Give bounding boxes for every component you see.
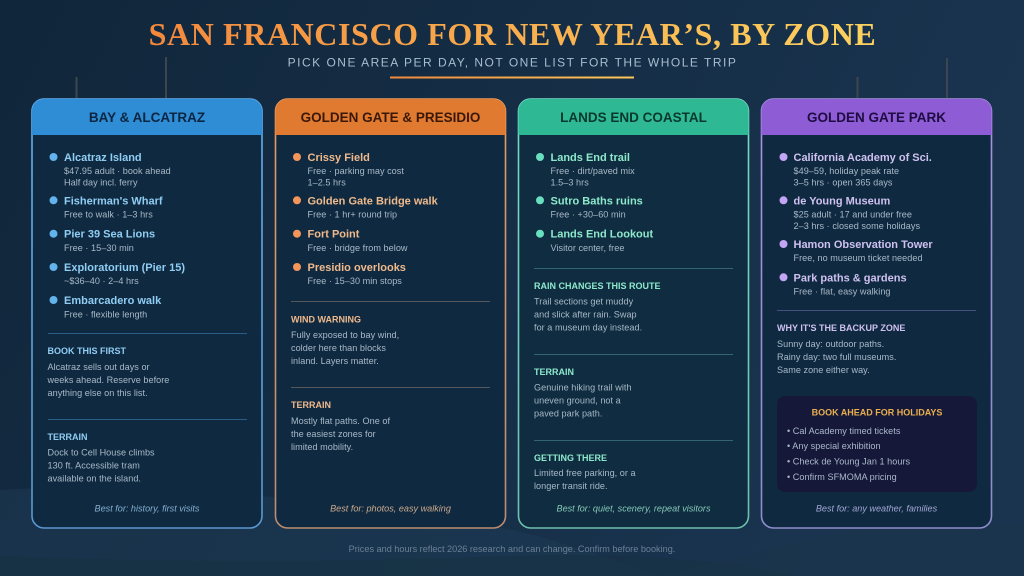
attractions list: Free · flexible length bbox=[64, 310, 147, 320]
panel: Golden Gate Park bbox=[762, 99, 992, 528]
section: terrain bbox=[291, 400, 390, 452]
best for: Best for: photos, easy walking bbox=[330, 504, 451, 514]
section: why it's the backup zone: WHY IT'S THE BACKUP ZONE bbox=[777, 323, 905, 333]
callout: book ahead for holidays bbox=[777, 396, 977, 492]
section: terrain: paved park path. bbox=[534, 408, 602, 418]
attractions list: Free, no museum ticket needed bbox=[794, 253, 923, 263]
attractions list bbox=[780, 152, 933, 296]
attractions list: 2–3 hrs · closed some holidays bbox=[794, 221, 920, 231]
best for: Best for: quiet, scenery, repeat visitors bbox=[556, 504, 711, 514]
section: book this first: anything else on this list. bbox=[48, 388, 148, 398]
section: why it's the backup zone: Rainy day: two full museums. bbox=[777, 352, 896, 362]
section: book this first: BOOK THIS FIRST bbox=[48, 346, 127, 356]
section: terrain: Mostly flat paths. One of bbox=[291, 416, 390, 426]
header: Golden Gate & Presidio bbox=[276, 99, 506, 135]
section: terrain: TERRAIN bbox=[48, 432, 88, 442]
attractions list: Free · +30–60 min bbox=[550, 210, 626, 220]
attractions list: Park paths & gardens bbox=[794, 272, 907, 284]
callout: book ahead for holidays: • Check de Young Jan 1 hours bbox=[787, 457, 911, 467]
attractions list: Free · dirt/paved mix bbox=[550, 166, 635, 176]
attractions list: Crissy Field bbox=[308, 152, 370, 164]
attractions list: $47.95 adult · book ahead bbox=[64, 166, 171, 176]
title: SAN FRANCISCO FOR NEW YEAR’S, BY ZONE bbox=[149, 16, 876, 52]
section: rain changes this route bbox=[534, 281, 661, 332]
section: wind warning: inland. Layers matter. bbox=[291, 356, 379, 366]
section: book this first bbox=[46, 346, 169, 398]
best for: Best for: history, first visits bbox=[95, 504, 200, 514]
attractions list: Hamon Observation Tower bbox=[794, 239, 933, 251]
callout: book ahead for holidays: • Any special exhibition bbox=[787, 441, 881, 451]
attractions list: ~$36–40 · 2–4 hrs bbox=[64, 276, 139, 286]
attractions list: Visitor center, free bbox=[550, 243, 624, 253]
panel: Golden Gate & Presidio bbox=[276, 99, 506, 528]
section: why it's the backup zone: Sunny day: outdoor paths. bbox=[777, 339, 884, 349]
section: getting there: longer transit ride. bbox=[534, 481, 608, 491]
section: why it's the backup zone: Same zone either way. bbox=[777, 365, 870, 375]
decorative posts above cards bbox=[76, 57, 947, 98]
attractions list: Lands End trail bbox=[550, 152, 630, 164]
attractions list: 3–5 hrs · open 365 days bbox=[794, 178, 893, 188]
attractions list: Fisherman's Wharf bbox=[64, 195, 163, 207]
section: wind warning bbox=[291, 314, 399, 366]
attractions list: $25 adult · 17 and under free bbox=[794, 210, 912, 220]
attractions list bbox=[50, 152, 185, 320]
section: rain changes this route: for a museum day instead. bbox=[534, 322, 642, 332]
panel: Lands End Coastal bbox=[518, 99, 748, 528]
callout: book ahead for holidays: BOOK AHEAD FOR HOLIDAYS bbox=[812, 408, 942, 418]
header: Lands End Coastal bbox=[518, 99, 748, 135]
section: terrain bbox=[534, 367, 632, 418]
best for: Best for: any weather, families bbox=[816, 504, 938, 514]
section: terrain: Dock to Cell House climbs bbox=[48, 448, 155, 458]
header: Golden Gate & Presidio: GOLDEN GATE & PRESIDIO bbox=[301, 110, 480, 125]
attractions list: Fort Point bbox=[308, 229, 360, 241]
subtitle: PICK ONE AREA PER DAY, NOT ONE LIST FOR THE WHOLE TRIP bbox=[288, 56, 737, 70]
attractions list: Golden Gate Bridge walk bbox=[308, 195, 439, 207]
section: terrain: the easiest zones for bbox=[291, 429, 376, 439]
section: terrain: available on the island. bbox=[48, 474, 141, 484]
section: getting there bbox=[534, 453, 637, 491]
attractions list: $49–59, holiday peak rate bbox=[794, 166, 899, 176]
section: rain changes this route: RAIN CHANGES THIS ROUTE bbox=[534, 281, 661, 291]
title underline bbox=[390, 76, 634, 78]
header: Lands End Coastal: LANDS END COASTAL bbox=[560, 110, 707, 125]
attractions list: Pier 39 Sea Lions bbox=[64, 229, 155, 241]
section: getting there: GETTING THERE bbox=[534, 453, 607, 463]
attractions list: Embarcadero walk bbox=[64, 295, 162, 307]
section: book this first: weeks ahead. Reserve before bbox=[46, 375, 169, 385]
attractions list: Free to walk · 1–3 hrs bbox=[64, 210, 153, 220]
attractions list: 1–2.5 hrs bbox=[308, 178, 346, 188]
section: rain changes this route: Trail sections get muddy bbox=[534, 296, 634, 306]
attractions list: Free · 15–30 min bbox=[64, 243, 134, 253]
attractions list: Free · 15–30 min stops bbox=[308, 276, 402, 286]
header: Golden Gate Park bbox=[762, 99, 992, 135]
section: wind warning: WIND WARNING bbox=[291, 314, 361, 324]
section: terrain: TERRAIN bbox=[291, 400, 331, 410]
attractions list bbox=[536, 152, 653, 253]
attractions list: de Young Museum bbox=[794, 195, 890, 207]
footer note: Prices and hours reflect 2026 research and can change. Confirm before booking. bbox=[349, 544, 675, 554]
attractions list: Half day incl. ferry bbox=[64, 178, 138, 188]
attractions list: Free · bridge from below bbox=[308, 243, 408, 253]
attractions list: Free · flat, easy walking bbox=[794, 286, 891, 296]
attractions list: Lands End Lookout bbox=[550, 229, 653, 241]
attractions list: Alcatraz Island bbox=[64, 152, 142, 164]
callout: book ahead for holidays: • Cal Academy timed tickets bbox=[787, 426, 901, 436]
attractions list: 1.5–3 hrs bbox=[550, 178, 589, 188]
section: rain changes this route: and slick after rain. Swap bbox=[534, 310, 637, 320]
section: terrain: TERRAIN bbox=[534, 367, 574, 377]
section: why it's the backup zone bbox=[777, 323, 905, 375]
section: wind warning: Fully exposed to bay wind, bbox=[291, 330, 399, 340]
header: Golden Gate Park: GOLDEN GATE PARK bbox=[807, 110, 946, 125]
attractions list: California Academy of Sci. bbox=[794, 152, 932, 164]
header: Bay & Alcatraz: BAY & ALCATRAZ bbox=[89, 110, 205, 125]
section: book this first: Alcatraz sells out days or bbox=[48, 362, 150, 372]
section: terrain: 130 ft. Accessible tram bbox=[48, 460, 140, 470]
panel: Bay & Alcatraz bbox=[32, 99, 262, 528]
section: getting there: Limited free parking, or a bbox=[534, 468, 637, 478]
attractions list: Sutro Baths ruins bbox=[550, 195, 643, 207]
callout: book ahead for holidays: • Confirm SFMOMA pricing bbox=[787, 472, 897, 482]
section: wind warning: colder here than blocks bbox=[291, 343, 386, 353]
attractions list: Presidio overlooks bbox=[308, 262, 406, 274]
attractions list: Free · 1 hr+ round trip bbox=[308, 210, 397, 220]
section: terrain: Genuine hiking trail with bbox=[534, 382, 632, 392]
section: terrain: uneven ground, not a bbox=[534, 396, 622, 406]
attractions list bbox=[293, 152, 439, 286]
section: terrain bbox=[48, 432, 155, 484]
attractions list: Free · parking may cost bbox=[308, 166, 404, 176]
section: terrain: limited mobility. bbox=[291, 442, 353, 452]
attractions list: Exploratorium (Pier 15) bbox=[64, 262, 185, 274]
header: Bay & Alcatraz bbox=[32, 99, 262, 135]
